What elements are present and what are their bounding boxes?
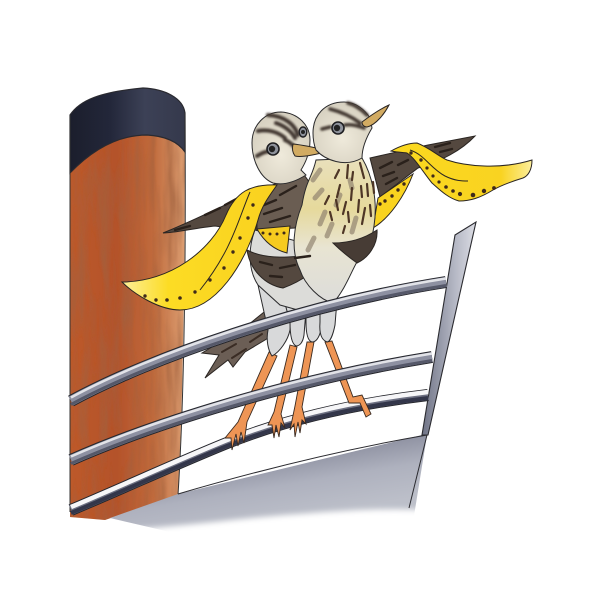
right scarf, inner part — [373, 174, 413, 228]
right scarf — [391, 143, 532, 201]
left bird eye near — [267, 143, 279, 155]
right bird lower wing — [333, 230, 377, 263]
fourth thigh — [320, 300, 337, 342]
second thigh — [284, 300, 306, 346]
left bird mantle — [257, 172, 315, 230]
left bird tail — [202, 296, 292, 378]
wing markings — [175, 143, 452, 277]
bottom railing — [71, 392, 428, 513]
legs — [225, 341, 371, 450]
leg 2 — [268, 345, 297, 438]
right bird head stripes — [322, 103, 367, 129]
right bird body — [294, 158, 375, 303]
right bird eye — [332, 122, 344, 134]
top railing — [71, 278, 446, 404]
bow post — [422, 222, 476, 435]
left bird lower body — [250, 230, 338, 312]
right bird beak — [362, 105, 389, 127]
leg 4 — [325, 341, 371, 417]
leg 3 — [290, 342, 314, 437]
left bird brown wing — [247, 250, 329, 288]
funnel — [70, 88, 185, 520]
right bird head — [313, 102, 389, 163]
leg 1 — [225, 352, 277, 450]
left bird wing, behind — [163, 192, 275, 233]
left bird beak — [292, 144, 329, 157]
left bird head — [252, 112, 329, 184]
leg feathers — [258, 285, 337, 356]
third thigh — [306, 310, 322, 342]
left thigh — [258, 285, 292, 356]
right bird wing, raised — [370, 136, 475, 197]
left scarf patch at chest — [257, 226, 290, 253]
ship hull — [110, 435, 427, 538]
left bird head stripes — [257, 115, 298, 156]
left bird eye far — [299, 127, 307, 137]
middle railing — [71, 354, 432, 464]
left scarf — [122, 185, 277, 310]
chest streaks — [308, 163, 374, 250]
